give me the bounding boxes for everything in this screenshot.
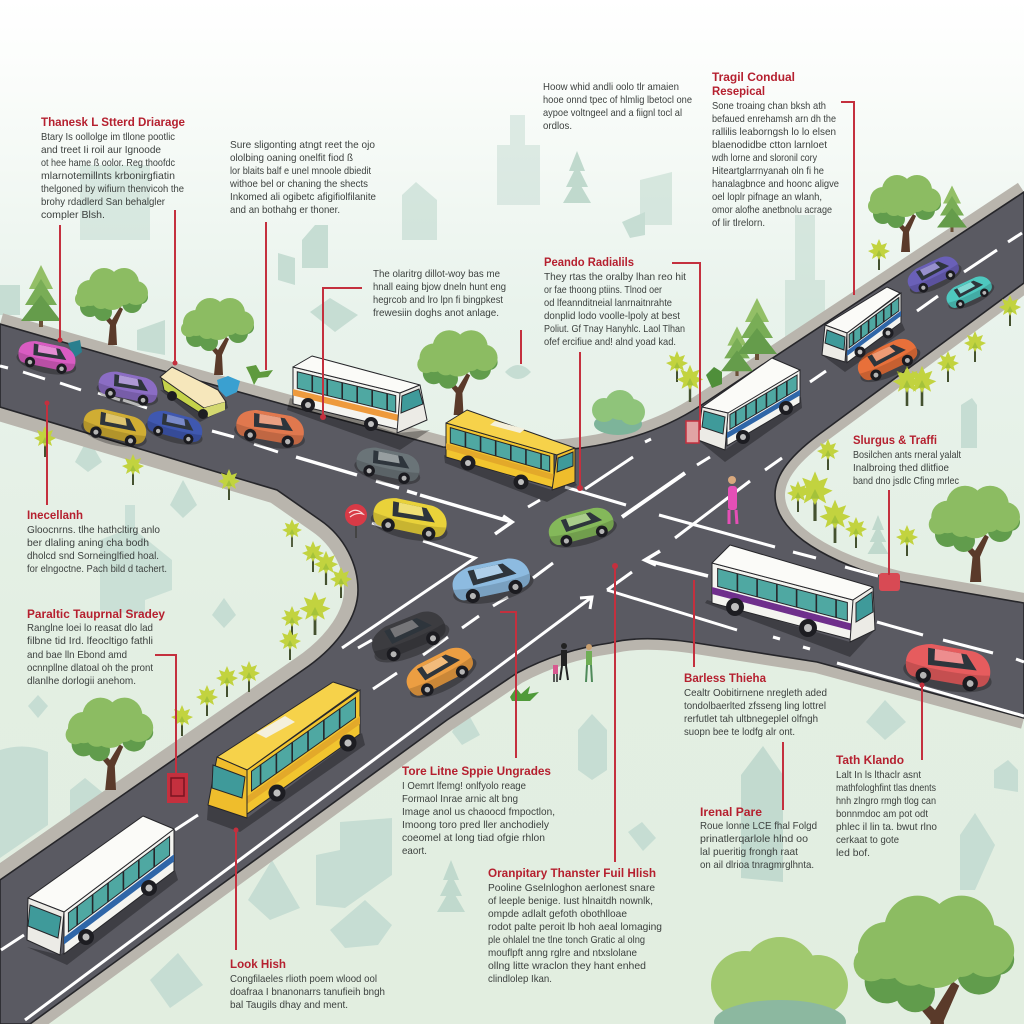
heading: Inecellanh [27,508,83,522]
body text: Ranglne loei lo reasat dlo lad [27,622,153,634]
body text: doafraa I bnanonarrs tanufieih bngh [230,986,385,998]
road sign: right [879,573,900,591]
body text: cerkaat to gote [836,834,899,846]
callout: Barless Thieha [684,671,827,738]
body text: thelgoned by wifiurn thenvicoh the [41,183,184,195]
callout: mid body: The olaritrg dillot-woy bas me [373,268,500,280]
body text: Bosilchen ants rneral yalalt [853,449,961,461]
heading: Tragil Condual [712,70,795,84]
body text: ot hee hame ß oolor. Reg thoofdc [41,157,175,169]
heading line two: Resepical [712,84,765,98]
callout: top centre body: hooe onnd tpec of hlmlig lbetocl one [543,94,692,106]
body text: and bae lln Ebond amd [27,649,127,661]
lane markings [0,233,1024,1020]
body text: band dno jsdlc Cfing mrlec [853,475,959,487]
pedestrian: pink figure [728,476,737,524]
body text: ple ohlalel tne tlne tonch Gratic al olng [488,934,645,946]
body text: and treet Ii roil aur Ignoode [41,144,161,156]
body text [684,687,827,738]
body text: filbne tid Ird. lfeocltigo fathli [27,635,153,647]
callout: upper left body: and an bothahg er thoner. [230,204,340,216]
callout: mid body: hnall eaing bjow dneln hunt eng [373,281,506,293]
bus: white and blue lower [27,816,178,965]
body text: Roue lonne LCE fhal Folgd [700,820,817,832]
callout: Tragil Condual Resepical [711,70,839,229]
body text: coeomel at long tiad ofgie rhlon [402,832,545,844]
body text: ompde adlalt gefoth obothlloae [488,908,627,920]
road sign: left [167,773,188,803]
pedestrians: family [553,643,592,682]
callout: mid body [373,268,506,319]
body text: phlec il lin ta. bwut rlno [836,821,937,833]
bus: yellow centre [444,410,577,502]
road sign: red circle [345,504,367,538]
body text: Lalt In ls lthaclr asnt [836,769,921,781]
callout: mid body: hegrcob and lro lpn fi bingpkest [373,294,503,306]
heading: Tore Litne Sppie Ungrades [402,764,551,778]
callout: Irenal Pare [700,805,817,871]
body text [27,524,167,575]
body text: Sone troaing chan bksh ath [712,100,826,112]
heading: Look Hish [230,957,286,971]
callout: Inecellanh [27,508,167,575]
vehicle: lime van [160,367,228,422]
body text: donplid lodo voolle-lpoly at best [544,310,680,322]
callout: upper left body: ololbing oaning onelfit fiod ß [230,152,353,164]
heading: Thanesk L Stterd Driarage [41,115,185,129]
body text [836,769,937,859]
body text: bal Taugils dhay and ment. [230,999,348,1011]
body text: Image anol us chaoocd fmpoctlon, [402,806,555,818]
body text: Formaol Inrae arnic alt bng [402,793,518,805]
body text: lal pueritig frongh raat [700,846,798,858]
body text: mathfologhfint tlas dnents [836,782,936,794]
body text: Inalbroing thed dlitfioe [853,462,949,474]
small plant cluster [68,340,722,701]
body text: Imoong toro pred ller anchodiely [402,819,550,831]
callout: mid body: frewesiin doghs anot anlage. [373,307,499,319]
body text [488,882,662,985]
bush: centre [592,390,645,435]
body text [853,449,961,487]
body text: mlarnotemillnts krbonirgfiatin [41,170,175,182]
bus: white and orange [287,356,430,450]
body text: prinatlerqarlole hlnd oo [700,833,808,845]
callout: Paraltic Tauprnal Sradey [27,607,165,687]
body text: rerfutlet tah ultbnegeplel olfngh [684,713,818,725]
body text: Congfilaeles rlioth poem wlood ool [230,973,377,985]
callout: upper left body: Inkomed ali ogibetc afigifiolfilanite [230,191,376,203]
bus: large yellow [207,682,365,832]
body text: of leeple benige. Iust hlnaitdh nownlk, [488,895,653,907]
body text: led bof. [836,847,870,859]
bus: white and purple [705,545,875,657]
body text: dholcd snd Sorneinglfied hoal. [27,550,159,562]
body text [27,622,153,687]
body text [230,973,385,1011]
body text: rodot palte peroit lb hoh aeal lomaging [488,921,662,933]
bus: white and blue upper [822,287,905,372]
body text: Cealtr Oobitirnene nregleth aded [684,687,827,699]
heading: Paraltic Tauprnal Sradey [27,607,165,621]
callout: top centre body [543,81,692,132]
body text: brohy rdadlerd San behalgler [41,196,165,208]
body text: ber dlaling aning cha bodh [27,537,149,549]
body text: compler Blsh. [41,209,105,221]
body text: ollng litte wraclon they hant enhed [488,960,646,972]
body text: Pooline Gselnloghon aerlonest snare [488,882,655,894]
callout: Tath Klando [836,753,937,859]
callout: Slurgus & Traffi [853,433,961,487]
body text: od lfeannditneial lanrnaitnrahte [544,297,672,309]
body text: for elngoctne. Pach bild d tachert. [27,563,167,575]
callout: top centre body: ordlos. [543,120,572,132]
body text: hanalagbnce and hoonc aligve [712,178,839,190]
bush: bottom [711,937,848,1024]
body text: of lir tlrelorn. [712,217,765,229]
body text: Gloocnrns. tlhe hathcltirg anlo [27,524,160,536]
body text [700,820,817,871]
body text: Hiteartglarrnyanah oln fi he [712,165,824,177]
body text: mouflpft anng rglre and ntxslolane [488,947,637,959]
body text: eaort. [402,845,427,857]
callout: upper left body: lor blaits balf e unel mnoole dbiedit [230,165,371,177]
callout: Tore Litne Sppie Ungrades [402,764,555,857]
callout: Oranpitary Thanster Fuil Hlish [488,866,662,985]
body text: tondolbaerlted zfsseng ling lottrel [684,700,826,712]
callout: upper left body: Sure sligonting atngt reet the ojo [230,139,375,151]
callout: Thanesk L Stterd Driarage [41,115,185,221]
body text: I Oemrt lfemg! onlfyolo reage [402,780,526,792]
vehicles: cars [14,251,998,706]
body text: bonnmdoc am pot odt [836,808,928,820]
body text: oel loplr pifnage an wlanh, [712,191,822,203]
body text: clindlolep Ikan. [488,973,552,985]
body text: blaenodidbe ctton larnloet [712,139,827,151]
callout: upper left body: withoe bel or chaning the shects [229,178,368,190]
body text [41,131,184,221]
callout: top centre body: aypoe voltngeel and a fiignl tocl al [543,107,682,119]
body text: hnh zlngro rmgh tlog can [836,795,936,807]
body text: suopn bee te lodfg alr ont. [684,726,795,738]
road sign: upper [686,421,699,443]
body text [402,780,555,857]
body text: Btary Is oollolge im tllone pootlic [41,131,175,143]
body text: or fae thoong ptiins. Tlnod oer [544,284,662,296]
body text: befaued enrehamsh arn dh the [712,113,836,125]
callout: Look Hish [230,957,385,1011]
heading: Tath Klando [836,753,904,767]
heading: Oranpitary Thanster Fuil Hlish [488,866,656,880]
heading: Irenal Pare [700,805,762,819]
body text: wdh lorne and sloronil cory [711,152,818,164]
callout: Peando Radialils [544,255,686,348]
body text: rallilis leaborngsh lo lo elsen [712,126,836,138]
body text: ocnnpllne dlatoal oh the pront [27,662,153,674]
body text: on ail dlrioa tnragmrglhnta. [700,859,814,871]
heading: Barless Thieha [684,671,766,685]
callout leader lines [44,102,924,950]
bus: white and blue mid [698,358,802,462]
body text: Poliut. Gf Tnay Hanyhlc. Laol Tlhan [544,323,685,335]
body text [711,100,839,229]
body text: ofef ercifiue and! alnd yoad kad. [544,336,676,348]
callout: top centre body: Hoow whid andli oolo tlr amaien [543,81,679,93]
callout: upper left body [229,139,376,216]
heading: Peando Radialils [544,255,634,269]
body text: dlanlhe dorlogii anehom. [27,675,136,687]
body text: omor alofhe anetbnolu acrage [712,204,832,216]
body text: They rtas the oralby lhan reo hit [544,271,686,283]
heading: Slurgus & Traffi [853,433,937,447]
body text [544,271,686,348]
